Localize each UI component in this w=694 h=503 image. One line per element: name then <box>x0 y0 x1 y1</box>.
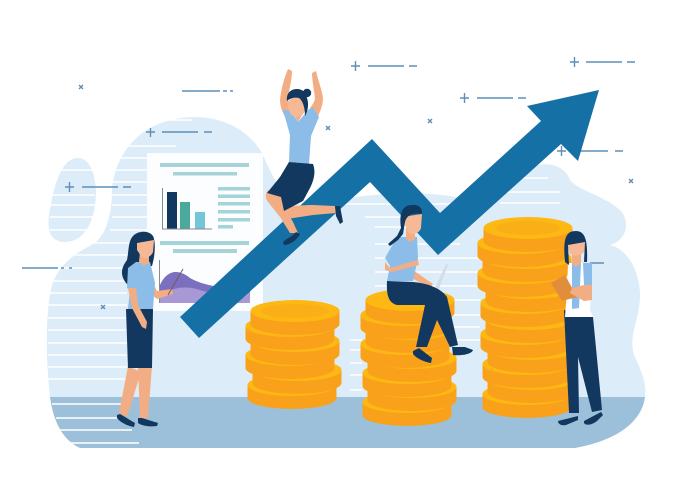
rising arrow <box>180 90 599 338</box>
person with clipboard <box>551 231 603 425</box>
coin stack right <box>478 217 576 418</box>
person jumping <box>266 69 343 245</box>
report text lines <box>160 163 250 253</box>
coin stack middle <box>360 289 456 426</box>
person sitting with laptop <box>385 205 473 363</box>
bar chart <box>162 188 212 229</box>
coin stack left <box>246 300 342 409</box>
decorative marks <box>22 57 635 309</box>
background blob <box>47 117 645 448</box>
area chart <box>160 260 250 303</box>
report document <box>147 153 263 311</box>
person with pointer <box>117 232 183 427</box>
